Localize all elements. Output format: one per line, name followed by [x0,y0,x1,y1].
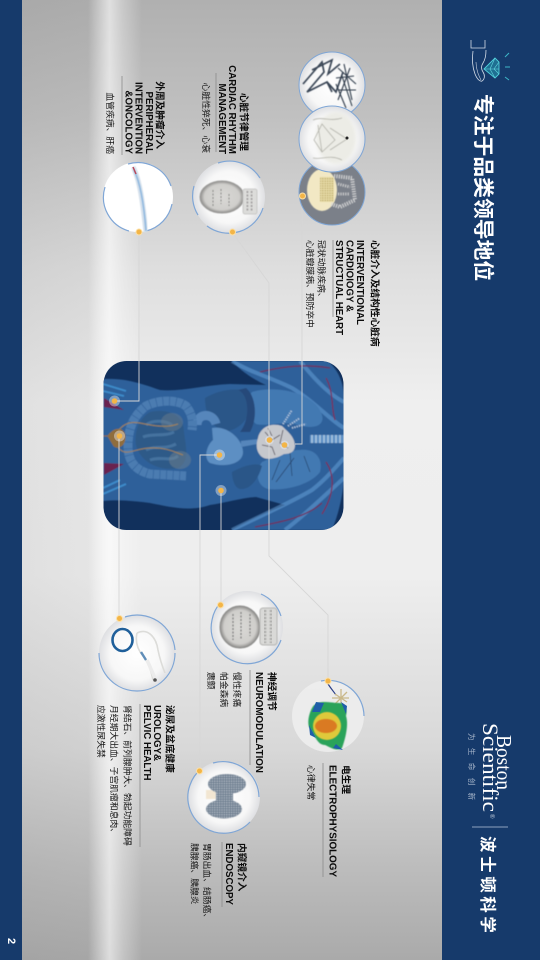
english heading: NEUROMODULATION [253,672,264,773]
body illustration [103,361,344,530]
trachea [310,435,344,443]
english heading: MANAGEMENT [216,84,227,154]
icon: pacemaker [193,161,265,233]
logo: Boston Scientific: ® [488,814,495,819]
english heading: STRUCTUAL HEART [333,240,344,335]
icon: catheter [103,162,173,232]
english heading [333,240,365,335]
leg vessels [103,384,126,494]
panel: peripheral intervention and oncology [103,76,173,235]
description [206,672,243,707]
marker dot [218,602,224,608]
icon: cardiac map [292,680,364,752]
marker dots on body [109,396,289,496]
icon: neurostimulator [211,591,283,664]
right header band [442,0,540,960]
heading: 心脏节律管理 [238,93,250,151]
title: 专注于品类领导地位 [471,94,495,281]
description [190,843,213,922]
lungs [247,389,322,427]
description: 心脏瓣膜病、预防卒中 [305,240,316,328]
stomach [197,415,216,425]
icon: tissue valve [299,106,365,172]
left footer band [0,0,22,960]
company name: 波士顿科学 [478,836,498,936]
english heading: CARDIOIOGY & [344,240,354,312]
bladder and ureters [103,429,125,447]
marker dot [325,678,331,684]
marker dot [116,616,122,622]
icon: stent valve [299,52,365,118]
large intestine [128,401,192,476]
description: 心脏性猝死、心衰 [201,83,212,153]
english heading: PERIPHERAL [143,92,154,154]
english heading [122,82,154,155]
heading: 电生理 [340,765,352,794]
heading: 神经调节 [266,672,278,711]
panel: cardiac rhythm management [193,65,265,235]
english heading: PELVIC HEALTH [141,705,152,781]
description: 应激性尿失禁 [96,705,107,758]
heading: 心脏介入及结构性心脏病 [368,240,382,347]
english heading: CARDIAC RHYTHM [226,65,237,154]
icon: hand holding diamond [471,40,510,81]
english heading: UROLOGY& [151,705,162,761]
description: 帕金森病 [219,672,230,707]
connector lines [115,196,328,771]
panel: neuromodulation [206,591,283,773]
description: 胰腺癌、胰腺炎 [190,843,200,905]
logo: Boston Scientific [467,723,516,819]
description: 震颤 [206,672,217,690]
icon: urology device [99,615,175,691]
panel: interventional cardiology [299,52,382,347]
slide background [22,0,442,960]
icon: dark valve device [299,159,365,225]
panel: urology and pelvic health [96,615,176,847]
heart [257,425,295,459]
heading: 外周及肿瘤介入 [154,81,166,149]
small intestine [136,411,186,469]
english heading: ENDOSCOPY [223,843,234,905]
heading: 泌尿及盆底健康 [164,705,176,773]
logo: Boston Scientific: 为生命创新 [467,733,477,808]
description: 胃肠出血、结肠癌、 [202,843,213,922]
panel: endoscopy [188,761,260,922]
torso silhouette [103,361,344,530]
page number: 2 [5,938,17,944]
description [305,240,328,328]
english heading: INTERVENTION [132,82,144,154]
english heading: &ONCOLOGY [122,90,134,155]
description: 月经期大出血、子宫肌瘤和息肉、 [109,705,120,837]
marker dot [136,229,142,235]
logo: Boston Scientific: Scientific [478,723,503,812]
description: 冠状动脉疾病、 [316,240,328,302]
liver and spleen [205,390,251,431]
english heading [216,65,237,154]
marker dot [300,193,306,199]
description: 心律失常 [306,765,317,800]
heading: 内窥镜介入 [236,843,248,892]
description: 肾结石、前列腺肿大、勃起功能障碍 [122,705,134,846]
english heading: ELECTROPHYSIOLOGY [326,765,338,878]
logo: Boston Scientific: Boston [492,735,516,790]
marker dot [230,229,236,235]
english heading [141,705,162,781]
icon: endoscopic stent [188,761,260,833]
description: 慢性疼痛 [232,672,243,707]
description: 血管疾病、肝癌 [105,92,116,154]
description [96,705,134,846]
english heading: INTERVENTIONAL [354,240,365,325]
marker dot [196,768,202,774]
panel: electrophysiology [292,678,364,878]
